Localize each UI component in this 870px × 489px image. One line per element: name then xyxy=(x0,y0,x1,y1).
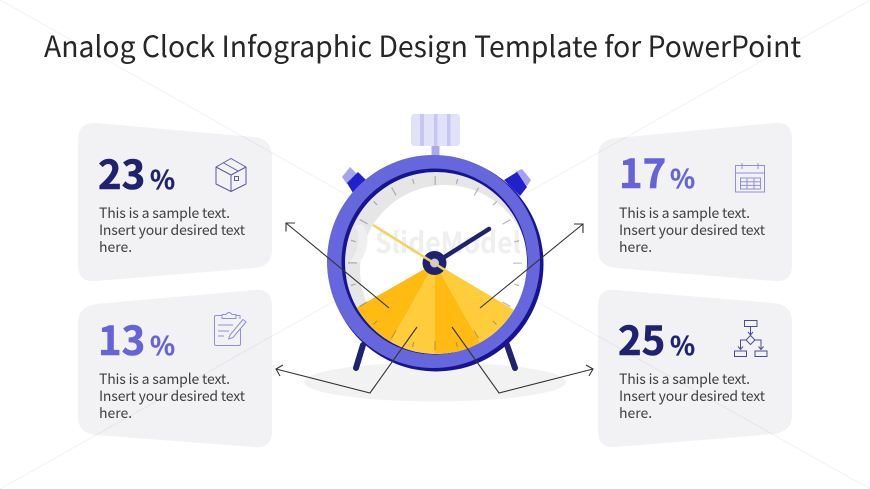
icon: box xyxy=(216,158,246,192)
text block: here. xyxy=(99,403,132,423)
panel: top-left 23% xyxy=(78,123,272,281)
icon: calendar xyxy=(736,163,764,192)
text block: here. xyxy=(619,237,652,257)
side buttons xyxy=(342,167,531,196)
arrow: bottom-left xyxy=(276,327,417,393)
clock xyxy=(327,114,544,372)
title: Analog Clock Infographic Design Template for PowerPoint xyxy=(44,24,801,66)
panel: top-right 17% xyxy=(598,123,792,281)
icon: clipboard xyxy=(214,312,246,346)
percentage: 17%: % xyxy=(670,159,695,196)
text block: here. xyxy=(619,403,652,423)
clock ring xyxy=(327,155,544,372)
arrow: top-left xyxy=(286,223,389,308)
text block: This is a sample text. xyxy=(619,203,750,223)
clock face xyxy=(345,172,530,355)
percentage: 13%: % xyxy=(150,326,175,363)
percentage: 13%: 13 xyxy=(98,309,145,367)
panel: bottom-left 13% xyxy=(78,290,272,447)
watermark: SlideModel xyxy=(375,220,521,262)
text block: Insert your desired text xyxy=(619,386,766,406)
hub xyxy=(422,251,446,275)
crown button xyxy=(411,114,460,158)
percentage: 23%: 23 xyxy=(98,143,145,201)
clock legs xyxy=(356,345,515,368)
percentage: 17%: 17 xyxy=(619,142,666,200)
text block: This is a sample text. xyxy=(99,369,230,389)
text block: here. xyxy=(99,237,132,257)
text block: This is a sample text. xyxy=(619,369,750,389)
text block: Insert your desired text xyxy=(99,386,246,406)
text block: Insert your desired text xyxy=(619,220,766,240)
tick marks xyxy=(350,178,520,348)
text block: This is a sample text. xyxy=(99,203,230,223)
second hand xyxy=(373,225,445,270)
arrow: bottom-right xyxy=(452,327,593,393)
percentage: 23%: % xyxy=(150,160,175,197)
hour hand xyxy=(435,229,489,263)
percentage: 25%: 25 xyxy=(618,309,665,367)
arrow: top-right xyxy=(480,224,583,308)
icon: flowchart xyxy=(734,320,767,356)
pie wedges xyxy=(356,269,514,354)
text block: Insert your desired text xyxy=(99,220,246,240)
panel: bottom-right 25% xyxy=(598,290,792,447)
clock shadow xyxy=(304,362,566,402)
percentage: 25%: % xyxy=(670,326,695,363)
